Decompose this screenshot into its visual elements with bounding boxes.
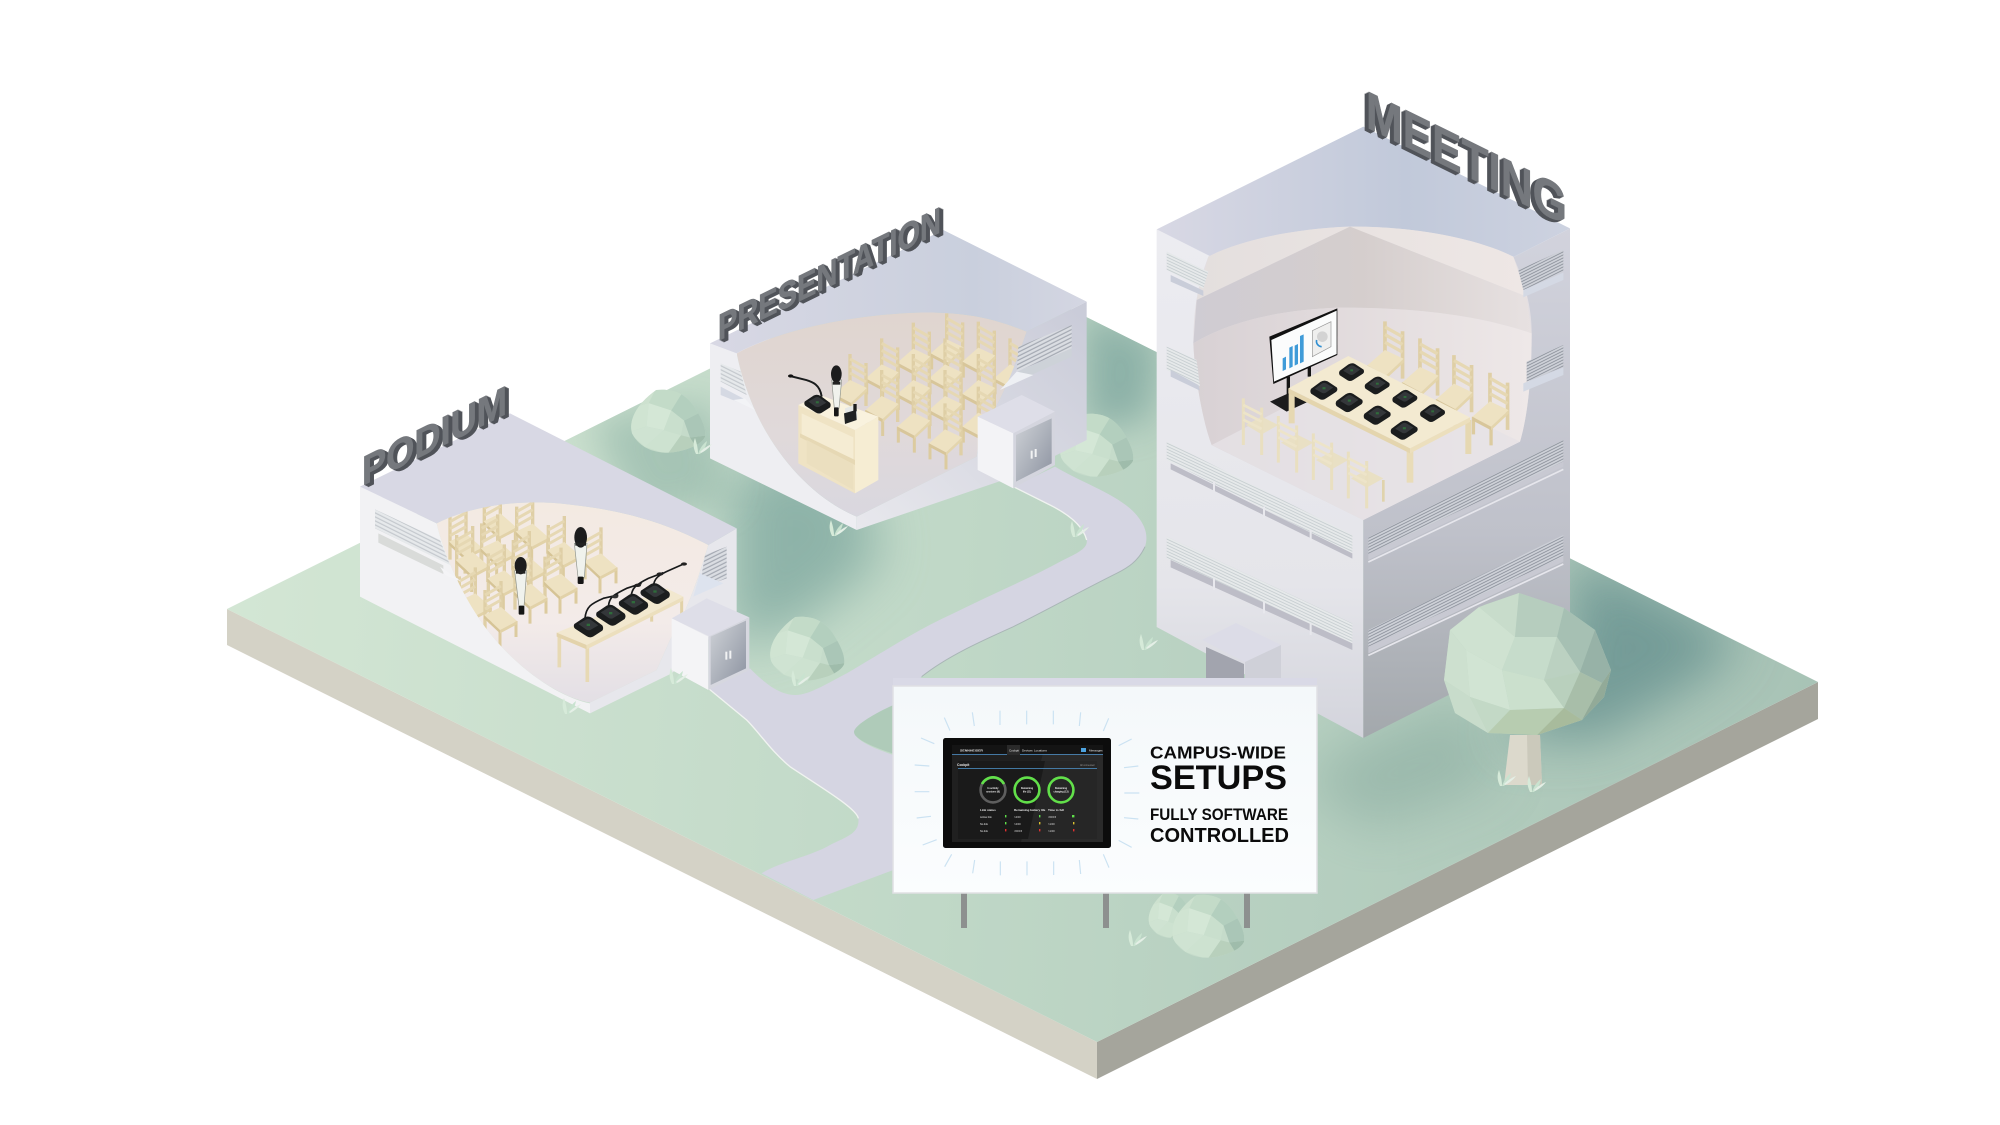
handheld microphone [831, 365, 842, 416]
dashboard labels: Remaining battery life [1014, 808, 1046, 812]
dashboard labels: Active link [980, 815, 992, 819]
dashboard labels: >1:00 [1048, 822, 1055, 826]
entrance box: meeting [1202, 623, 1281, 690]
tablet with software dashboard [943, 738, 1111, 848]
footpath connecting buildings [708, 467, 1146, 900]
status ring: charging [1049, 778, 1073, 802]
bush: behind presentation [628, 388, 708, 455]
status dots [1005, 815, 1074, 831]
billboard [893, 678, 1317, 928]
open room cut-out [1193, 227, 1532, 520]
podium chairs [449, 487, 617, 647]
roof [710, 230, 1087, 353]
dashboard labels: SENNHEISER [960, 748, 984, 752]
lectern [798, 395, 878, 493]
platform right side [1097, 682, 1818, 1079]
billboard headline: SETUPS [1150, 759, 1287, 797]
building: meeting [1157, 127, 1570, 738]
billboard posts [961, 890, 1250, 928]
upper right vents [1518, 250, 1563, 392]
building: presentation [710, 230, 1087, 530]
status ring: battery [1015, 778, 1039, 802]
ground platform [227, 249, 1818, 1079]
entrance box [978, 395, 1055, 488]
bodypack transmitter [844, 404, 857, 424]
front row chairs [1243, 398, 1383, 508]
grass island inside path bend [854, 697, 913, 760]
ring captions: Remaining [1021, 787, 1034, 790]
lower right vent [1368, 535, 1563, 655]
lower left vent [1167, 537, 1352, 650]
tree [1444, 593, 1611, 785]
ring captions: life (11) [1023, 790, 1031, 794]
right vent [693, 547, 727, 597]
dashboard labels: No link [980, 829, 989, 833]
mid right vent [1368, 440, 1563, 562]
foliage [1444, 593, 1611, 735]
ring captions [986, 787, 1069, 794]
meeting table [1288, 356, 1470, 483]
trunk [1504, 735, 1542, 785]
lawn [227, 249, 1818, 1042]
dashboard labels: All connected [1080, 764, 1095, 767]
billboard headline: CONTROLLED [1150, 825, 1289, 847]
ring captions: In activity [987, 787, 999, 790]
screen [952, 745, 1103, 842]
ceiling slab [1197, 227, 1527, 300]
left facade [1157, 229, 1363, 738]
billboard headline [1150, 742, 1289, 847]
room interior [437, 502, 708, 703]
billboard headline: CAMPUS-WIDE [1150, 742, 1286, 762]
four gooseneck microphones [574, 562, 687, 637]
tabletop conference units [1310, 363, 1445, 440]
handheld microphone 2 [574, 527, 587, 584]
right wall [590, 528, 737, 713]
left wall [710, 343, 857, 530]
left vent [721, 363, 755, 410]
handheld microphone 1 [515, 557, 527, 615]
conference table [557, 588, 683, 682]
ring captions: sessions (6) [986, 790, 1000, 794]
presentation chairs [834, 313, 1027, 469]
dashboard labels: >4:00 [1014, 822, 1021, 826]
left wall [360, 487, 590, 713]
dashboard labels: Devices [1022, 748, 1033, 752]
display on stand [1269, 308, 1337, 412]
status ring: link [981, 777, 1005, 802]
bush: right of presentation door [1057, 412, 1136, 479]
roof [1157, 127, 1570, 333]
entrance box [672, 598, 749, 690]
dashboard labels: Locations [1034, 748, 1047, 752]
dashboard labels: <00:15 [1048, 815, 1057, 819]
rooftop label: meeting: MEETING [1366, 79, 1567, 237]
rooftop label: presentation: PRESENTATION [718, 200, 941, 350]
dashboard labels: Time to full [1048, 808, 1064, 812]
cast shadows on lawn [590, 310, 1745, 830]
ring captions: charging (13) [1053, 790, 1069, 794]
right wall [857, 302, 1087, 530]
right facade [1363, 228, 1570, 738]
billboard panel [893, 678, 1317, 687]
room interior [737, 313, 1027, 517]
dashboard labels: Link status [980, 808, 996, 812]
dashboard labels: Cockpit [957, 763, 970, 767]
radiating ticks [915, 711, 1139, 875]
dashboard labels: Messages [1089, 748, 1103, 752]
right vent [1000, 325, 1072, 390]
upper left vents [1167, 252, 1208, 391]
back row chairs [1367, 321, 1509, 445]
building: podium [360, 413, 749, 713]
dashboard labels: <00:15 [1014, 829, 1023, 833]
platform left side [227, 609, 1097, 1079]
grass tufts [563, 438, 1546, 946]
ring captions: Remaining [1055, 787, 1068, 790]
dashboard labels [957, 748, 1103, 833]
rooftop label: podium: PODIUM [362, 378, 507, 495]
bush: by podium door [767, 615, 847, 683]
bushes below billboard [1147, 891, 1247, 960]
dashboard labels: >4:00 [1014, 815, 1021, 819]
left vent [375, 509, 462, 582]
gooseneck microphone unit [788, 374, 831, 414]
dashboard labels: Cockpit [1009, 748, 1019, 752]
roof [360, 413, 737, 545]
dashboard labels: No link [980, 822, 989, 826]
dashboard labels: >1:00 [1048, 829, 1055, 833]
mid left vent [1167, 442, 1352, 559]
billboard headline: FULLY SOFTWARE [1150, 806, 1288, 824]
back walls and floor [1193, 308, 1532, 520]
